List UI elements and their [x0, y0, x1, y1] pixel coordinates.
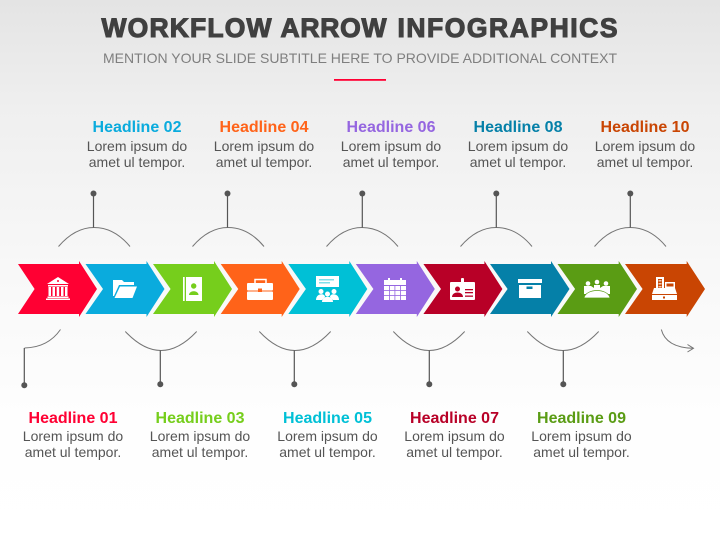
top headline 10: Lorem ipsum do — [595, 138, 695, 154]
title accent rule — [334, 79, 386, 81]
arrow 10 — [625, 261, 705, 317]
bottom headline 05: Headline 05 — [283, 410, 372, 427]
title — [102, 13, 618, 43]
arrow 01 — [18, 261, 97, 317]
top headline 08 — [468, 119, 568, 170]
top headline 08: Headline 08 — [474, 119, 563, 136]
title: ARROW — [280, 13, 386, 43]
bottom headline 03: amet ul tempor. — [152, 444, 248, 460]
icon: team table — [584, 280, 610, 298]
connector: bottom 01 — [21, 330, 60, 388]
connector: top 04 — [192, 190, 264, 246]
bottom headline 07: amet ul tempor. — [406, 444, 503, 460]
connector: top 06 — [326, 190, 398, 246]
icon: storage box — [518, 279, 542, 298]
bottom headline 09 — [531, 410, 632, 460]
top headline 08: Lorem ipsum do — [468, 138, 568, 154]
arrow 08 — [490, 261, 570, 317]
top headline 08: amet ul tempor. — [470, 154, 566, 170]
top headline 10: Headline 10 — [601, 119, 690, 136]
icon: folder — [113, 280, 137, 298]
bottom headline 05: amet ul tempor. — [279, 444, 376, 460]
bottom headline 05: Lorem ipsum do — [277, 428, 378, 444]
arrow 04 — [221, 261, 300, 317]
connector: bottom 05 — [259, 332, 331, 387]
icon: id card — [450, 278, 475, 300]
icon: contact book — [183, 277, 202, 301]
subtitle: MENTION YOUR SLIDE SUBTITLE HERE TO PROVIDE ADDITIONAL CONTEXT — [103, 50, 617, 66]
connector: bottom 03 — [125, 332, 197, 387]
arrow 09 — [558, 261, 637, 317]
top headline 02 — [87, 119, 187, 170]
connector: top 10 — [594, 190, 666, 246]
icon: calendar — [384, 278, 406, 300]
title: WORKFLOW — [102, 13, 272, 43]
icon: bank — [46, 277, 70, 300]
title: INFOGRAPHICS — [398, 13, 618, 43]
top headline 04 — [214, 119, 314, 170]
bottom headline 01 — [23, 410, 123, 460]
bottom headline 05 — [277, 410, 378, 460]
connector: top 02 — [58, 190, 130, 246]
bottom headline 01: amet ul tempor. — [25, 444, 121, 460]
top headline 10: amet ul tempor. — [597, 154, 693, 170]
top headline 02: Lorem ipsum do — [87, 138, 187, 154]
bottom headline 03: Lorem ipsum do — [150, 428, 250, 444]
connector: top 08 — [460, 190, 532, 246]
top headline 06 — [341, 119, 441, 170]
bottom headline 07: Lorem ipsum do — [404, 428, 505, 444]
top headline 04: Lorem ipsum do — [214, 138, 314, 154]
bottom headline 03 — [150, 410, 250, 460]
bottom headline 03: Headline 03 — [156, 410, 245, 427]
bottom headline 09: Lorem ipsum do — [531, 428, 632, 444]
arrow 02 — [86, 261, 164, 317]
top headline 10 — [595, 119, 695, 170]
icon: cash register — [652, 277, 677, 300]
arrow: closing curve — [661, 330, 694, 352]
bottom headline 09: amet ul tempor. — [533, 444, 630, 460]
bottom headline 07: Headline 07 — [410, 410, 499, 427]
connector: bottom 09 — [527, 332, 599, 387]
arrow 07 — [423, 261, 502, 317]
icon: briefcase — [247, 280, 273, 300]
top headline 02: Headline 02 — [93, 119, 182, 136]
bottom headline 09: Headline 09 — [537, 410, 626, 427]
bottom headline 07 — [404, 410, 505, 460]
arrow 03 — [153, 261, 232, 317]
arrow 06 — [356, 261, 435, 317]
bottom headline 01: Lorem ipsum do — [23, 428, 123, 444]
top headline 04: Headline 04 — [220, 119, 309, 136]
icon: meeting presentation — [316, 276, 339, 302]
top headline 04: amet ul tempor. — [216, 154, 312, 170]
top headline 06: Lorem ipsum do — [341, 138, 441, 154]
connector: bottom 07 — [393, 332, 465, 387]
top headline 06: amet ul tempor. — [343, 154, 439, 170]
bottom headline 01: Headline 01 — [29, 410, 118, 427]
top headline 06: Headline 06 — [347, 119, 436, 136]
top headline 02: amet ul tempor. — [89, 154, 185, 170]
arrow 05 — [288, 261, 367, 317]
